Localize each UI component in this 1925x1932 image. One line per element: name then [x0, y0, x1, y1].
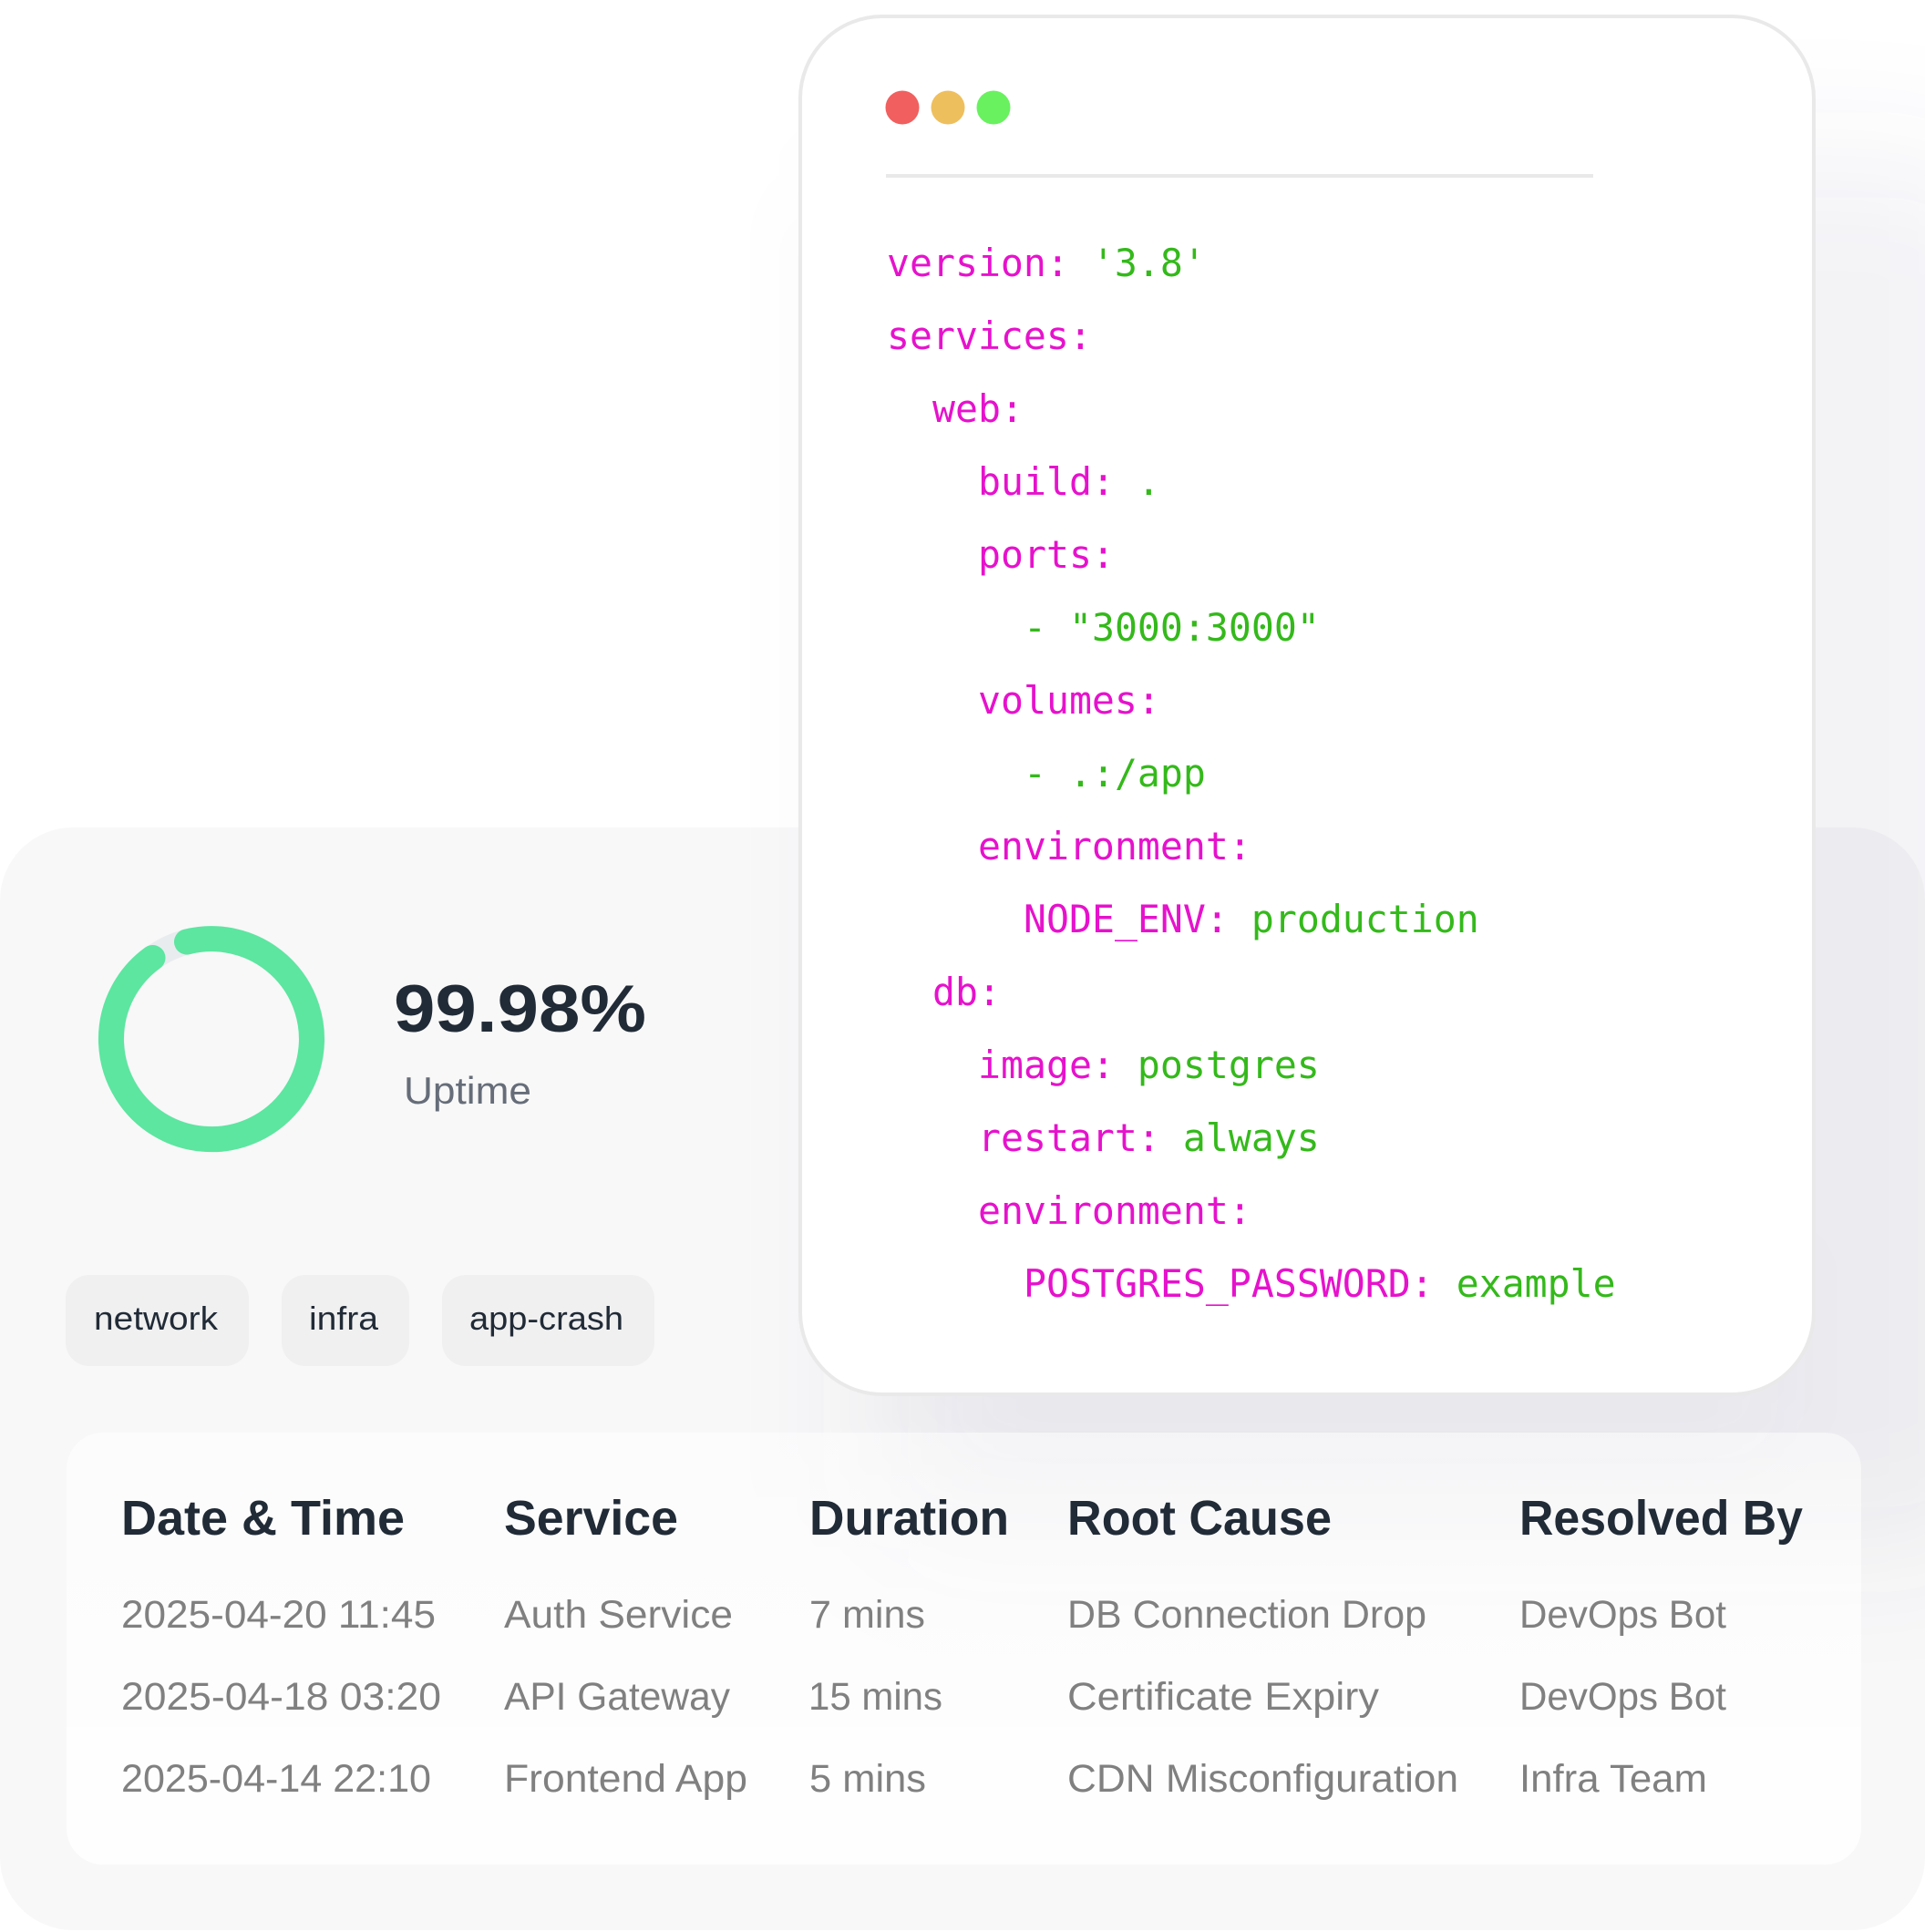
panel: code window [800, 16, 1814, 1394]
code block: - "3000:3000" [1024, 605, 1320, 650]
panel: incidents table [67, 1433, 1861, 1865]
code block: build: . [978, 459, 1160, 504]
tag: infra: infra [309, 1300, 379, 1337]
tag: app-crash [442, 1275, 654, 1366]
code block: POSTGRES_PASSWORD: example [1024, 1261, 1616, 1306]
code block: version: '3.8' [887, 241, 1206, 285]
table row 2: 2025-04-18 03:20 [121, 1675, 441, 1719]
table row 1: 2025-04-20 11:45 [121, 1593, 436, 1637]
tags [66, 1275, 654, 1366]
table header: Date & Time [121, 1491, 405, 1546]
uptime label: Uptime [404, 1069, 531, 1112]
code block [887, 241, 1616, 1306]
table header: Service [504, 1491, 678, 1546]
code block: NODE_ENV: production [1024, 897, 1479, 941]
table header: Root Cause [1067, 1491, 1332, 1546]
table row 3: 2025-04-14 22:10 [121, 1757, 431, 1801]
table row 1: Auth Service [504, 1593, 733, 1637]
code block: environment: [978, 1188, 1251, 1233]
table row 2 [121, 1675, 1726, 1719]
code block: restart: always [978, 1115, 1320, 1160]
table row 1 [121, 1593, 1726, 1637]
table row 3: Frontend App [504, 1757, 747, 1801]
table row 1: DB Connection Drop [1067, 1593, 1426, 1637]
table row 2: DevOps Bot [1519, 1675, 1726, 1719]
table row 3 [121, 1757, 1707, 1801]
code block: services: [887, 313, 1092, 358]
table row 2: 15 mins [808, 1675, 942, 1719]
tag: network [66, 1275, 249, 1366]
code block: image: postgres [978, 1043, 1320, 1087]
table row 3: Infra Team [1519, 1757, 1707, 1801]
table row 3: CDN Misconfiguration [1067, 1757, 1458, 1801]
code block: - .:/app [1024, 751, 1206, 796]
table header: Resolved By [1519, 1491, 1803, 1546]
code block: ports: [978, 532, 1115, 577]
panel: uptime and incidents background [0, 827, 1925, 1930]
table row 2: Certificate Expiry [1067, 1675, 1380, 1719]
tag: network: network [94, 1300, 219, 1337]
tag: infra [282, 1275, 409, 1366]
code block: volumes: [978, 678, 1160, 723]
table row 2: API Gateway [504, 1675, 730, 1719]
table header [121, 1491, 1803, 1546]
card shadow [866, 155, 1925, 1549]
tag: app-crash: app-crash [469, 1300, 623, 1337]
code block: environment: [978, 824, 1251, 868]
table row 1: DevOps Bot [1519, 1593, 1726, 1637]
window controls [886, 91, 1010, 124]
table row 1: 7 mins [809, 1593, 925, 1637]
uptime value: 99.98% [394, 972, 646, 1046]
table header: Duration [809, 1491, 1009, 1546]
uptime donut chart [111, 939, 312, 1139]
code block: web: [932, 386, 1024, 431]
table row 3: 5 mins [809, 1757, 926, 1801]
code block: db: [932, 970, 1001, 1014]
